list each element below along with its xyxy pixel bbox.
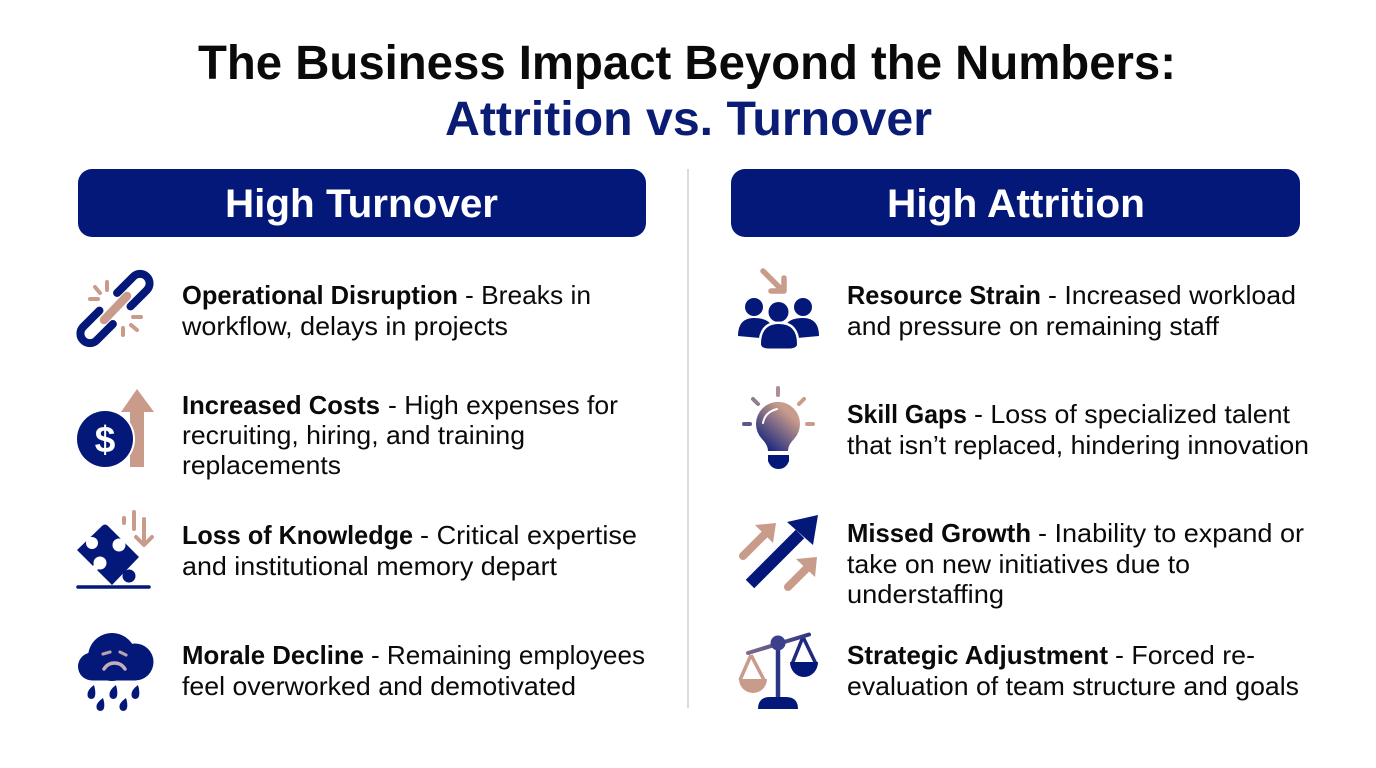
text: missed growth: understaffing bbox=[847, 579, 1004, 609]
icon: dollar with rising arrow: $ bbox=[95, 419, 116, 460]
text: morale decline: Morale Decline bbox=[182, 640, 364, 670]
icon: light bulb bbox=[744, 388, 813, 469]
heading: high turnover bbox=[78, 169, 646, 237]
icon: dollar with rising arrow bbox=[75, 389, 154, 469]
text: operational disruption: Operational Disruption bbox=[182, 280, 458, 310]
text: morale decline: feel overworked and demotivated bbox=[182, 671, 576, 701]
text: missed growth bbox=[847, 518, 1304, 609]
text: skill gaps bbox=[847, 399, 1309, 460]
panel: high turnover bbox=[75, 169, 646, 711]
text: skill gaps: Skill Gaps bbox=[847, 399, 967, 429]
text: loss of knowledge bbox=[182, 520, 637, 581]
title: Attrition vs. Turnover bbox=[445, 93, 932, 146]
text: missed growth: take on new initiatives due to bbox=[847, 549, 1190, 579]
text: morale decline: - Remaining employees bbox=[371, 640, 645, 670]
text: strategic adjustment bbox=[847, 640, 1299, 701]
icon: sad rain cloud bbox=[78, 633, 154, 711]
text: skill gaps: that isn’t replaced, hindering innovation bbox=[847, 430, 1309, 460]
text: missed growth: - Inability to expand or bbox=[1038, 518, 1304, 548]
text: operational disruption: workflow, delays in projects bbox=[181, 311, 508, 341]
text: increased costs bbox=[182, 390, 618, 480]
text: resource strain bbox=[847, 280, 1296, 341]
text: resource strain: Resource Strain bbox=[847, 280, 1041, 310]
text: loss of knowledge: - Critical expertise bbox=[420, 520, 637, 550]
text: increased costs: - High expenses for bbox=[388, 390, 618, 420]
text: strategic adjustment: evaluation of team structure and goals bbox=[847, 671, 1299, 701]
heading: high attrition: High Attrition bbox=[887, 182, 1145, 226]
icon: broken chain link bbox=[76, 270, 154, 347]
text: increased costs: Increased Costs bbox=[182, 390, 380, 420]
text: missed growth: Missed Growth bbox=[847, 518, 1031, 548]
text: operational disruption bbox=[181, 280, 591, 341]
icon: team with incoming arrow bbox=[738, 271, 819, 348]
icon: balance scale bbox=[739, 634, 818, 709]
text: skill gaps: - Loss of specialized talent bbox=[974, 399, 1291, 429]
text: increased costs: replacements bbox=[182, 450, 341, 480]
icon: puzzle piece with down arrows bbox=[77, 512, 152, 587]
heading: high turnover: High Turnover bbox=[225, 182, 498, 226]
heading: high attrition bbox=[731, 169, 1300, 237]
text: increased costs: recruiting, hiring, and training bbox=[182, 420, 525, 450]
icon: growth arrows bbox=[743, 515, 818, 587]
text: strategic adjustment: Strategic Adjustment bbox=[847, 640, 1108, 670]
text: morale decline bbox=[182, 640, 645, 701]
text: resource strain: and pressure on remaining staff bbox=[847, 311, 1220, 341]
text: operational disruption: - Breaks in bbox=[465, 280, 591, 310]
text: loss of knowledge: Loss of Knowledge bbox=[182, 520, 413, 550]
title bbox=[198, 37, 1176, 146]
text: resource strain: - Increased workload bbox=[1048, 280, 1296, 310]
text: loss of knowledge: and institutional memory depart bbox=[182, 551, 558, 581]
panel: high attrition bbox=[731, 169, 1309, 709]
text: strategic adjustment: - Forced re- bbox=[1115, 640, 1255, 670]
title: The Business Impact Beyond the Numbers: bbox=[198, 37, 1176, 90]
